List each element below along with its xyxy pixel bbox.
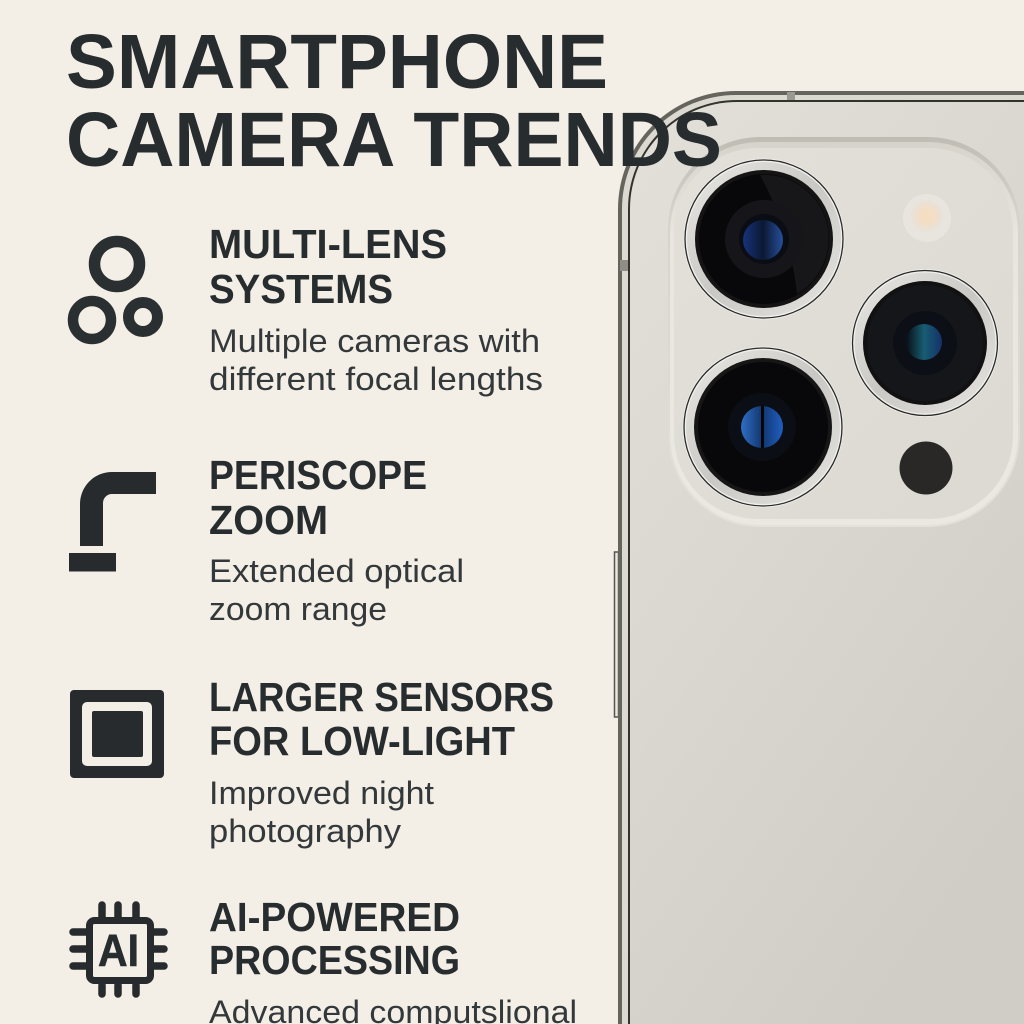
description: Multiple cameras with [209,323,540,359]
lens: telephoto [682,346,844,508]
phone frame metal band [622,95,1024,1024]
lens: ultrawide [851,269,999,417]
icon: sensor [70,690,164,778]
lidar sensor [900,442,952,494]
heading: SYSTEMS [209,266,393,312]
trend: AI-powered processing [73,894,577,1024]
description: photography [209,813,402,849]
heading: MULTI-LENS [209,221,447,267]
heading [209,674,554,764]
description [209,553,464,627]
trend: multi-lens systems [73,221,543,397]
trend: periscope zoom [69,452,464,627]
bump highlight [670,142,1018,525]
phone back panel [630,102,1024,1024]
antenna band left [620,260,628,271]
title: SMARTPHONE [66,19,608,105]
description: Extended optical [209,553,464,589]
description [209,323,543,397]
flash [903,194,951,242]
trend: larger sensors [70,674,554,849]
bump rim [668,137,1020,527]
heading: ZOOM [209,497,328,543]
description: Improved night [209,775,434,811]
phone frame outer edge [618,91,1024,1024]
icon: periscope [69,472,156,572]
camera bump [668,137,1020,527]
heading [209,452,427,543]
heading [209,894,460,983]
heading: PROCESSING [209,937,460,983]
icon: three lenses [73,242,158,339]
icon: AI chip: AI [98,925,139,976]
description [209,775,434,849]
title: CAMERA TRENDS [66,97,722,183]
antenna band top [787,92,795,100]
bump face [674,148,1013,519]
phone frame inner line [628,100,1024,1024]
phone illustration [614,91,1024,1024]
description: zoom range [209,591,387,627]
icon: AI chip [73,905,164,994]
lens: main [684,158,844,320]
title [66,19,722,183]
description: different focal lengths [209,361,543,397]
heading: FOR LOW-LIGHT [209,718,515,764]
heading: LARGER SENSORS [209,674,554,720]
heading: AI-POWERED [209,894,460,940]
phone side button [614,552,618,717]
heading: PERISCOPE [209,452,427,498]
heading [209,221,447,312]
